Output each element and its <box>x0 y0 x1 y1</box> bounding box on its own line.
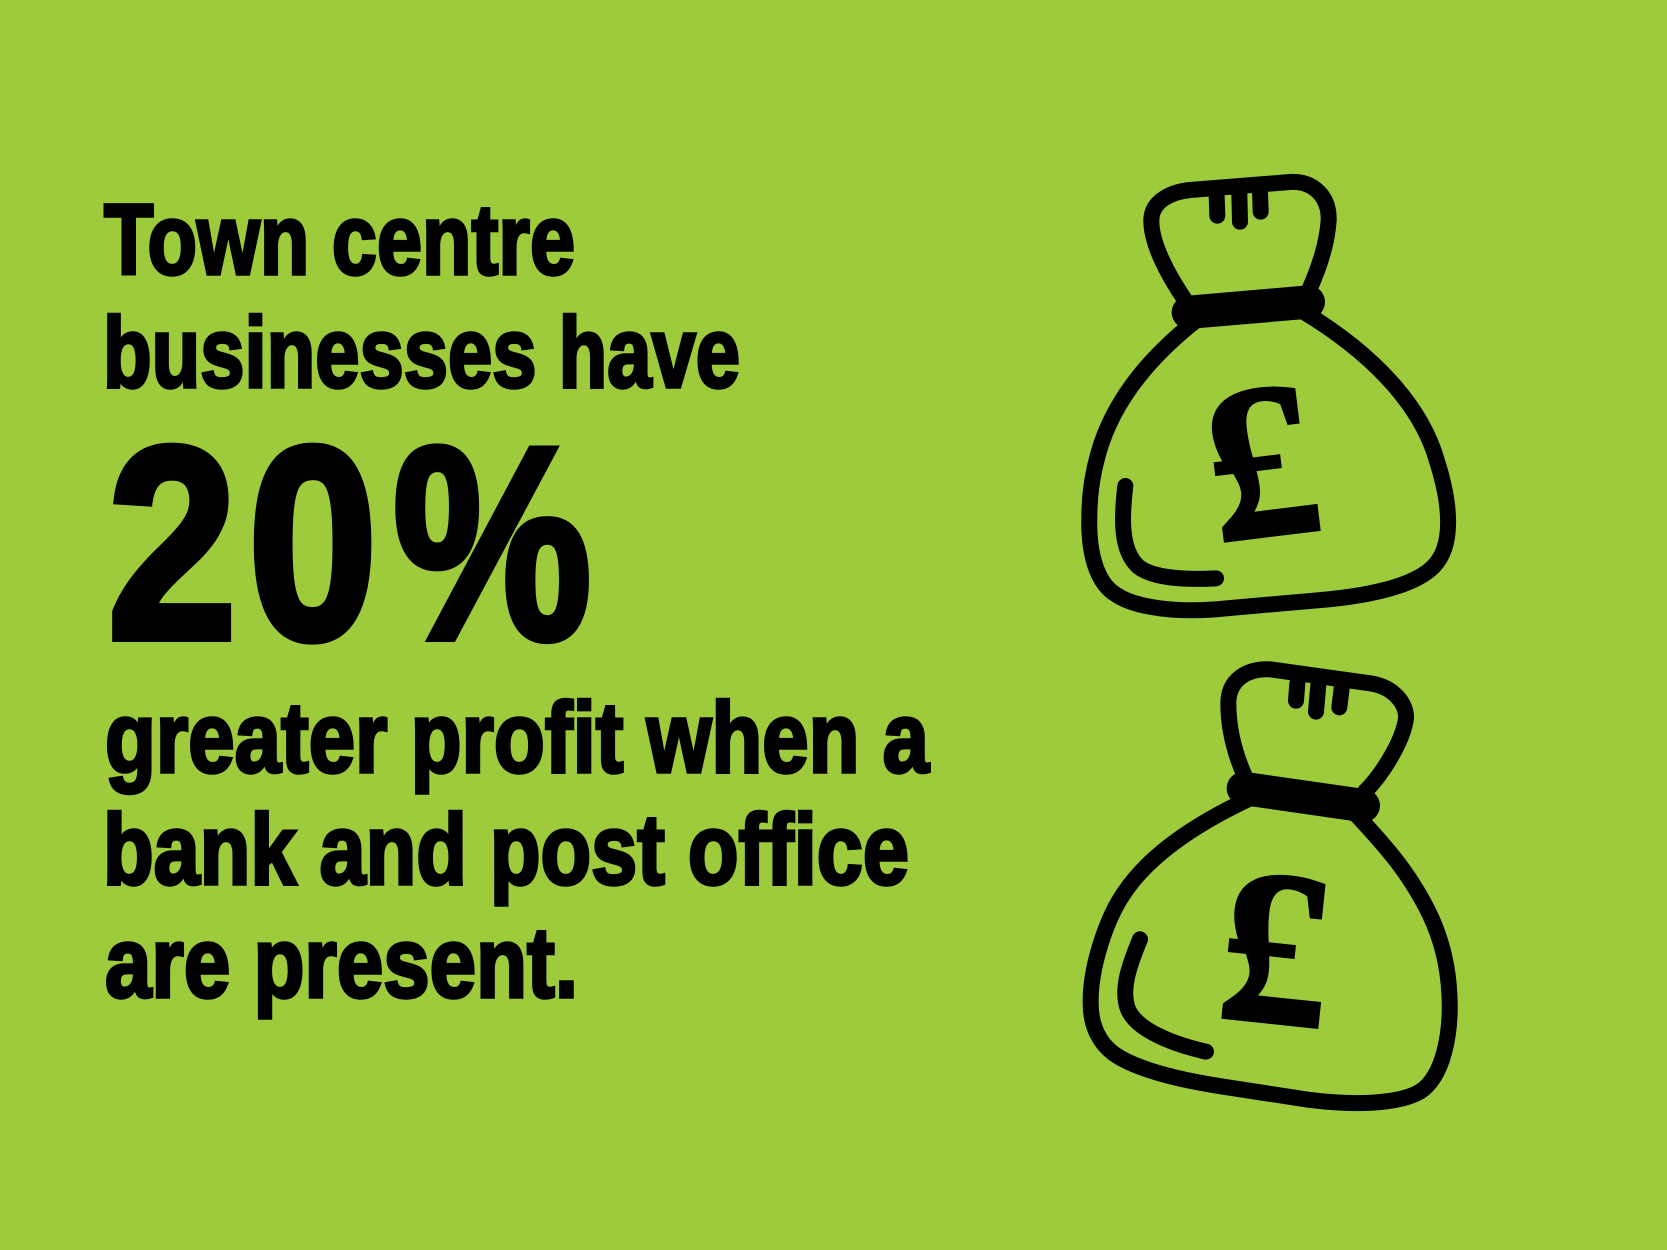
pound sign: £ <box>1192 332 1332 590</box>
text line: businesses have: businesses have <box>103 297 740 409</box>
bag body <box>1089 312 1448 610</box>
icon: money bag top <box>1089 182 1448 610</box>
bag body <box>1091 798 1450 1103</box>
text line: greater profit when a: greater profit when a <box>105 682 930 794</box>
percent sign: % <box>393 390 592 696</box>
highlight stroke <box>1123 486 1216 579</box>
text line: bank and post office: bank and post office <box>103 794 909 906</box>
statement text block <box>103 184 930 1019</box>
digit 0: 0 <box>248 390 378 696</box>
text line: Town centre: Town centre <box>104 184 575 296</box>
highlight stroke <box>1125 939 1206 1052</box>
bag neck <box>1151 182 1329 300</box>
drawstrings <box>1217 192 1261 222</box>
tie band <box>1243 788 1363 806</box>
pound sign: £ <box>1209 820 1345 1076</box>
tie band <box>1188 302 1308 312</box>
drawstrings <box>1296 683 1342 712</box>
text line: are present.: are present. <box>105 907 578 1019</box>
bag neck <box>1228 669 1406 792</box>
icon: money bag bottom <box>1091 669 1450 1103</box>
digit 2: 2 <box>108 390 237 696</box>
big number: 20% <box>108 390 592 696</box>
